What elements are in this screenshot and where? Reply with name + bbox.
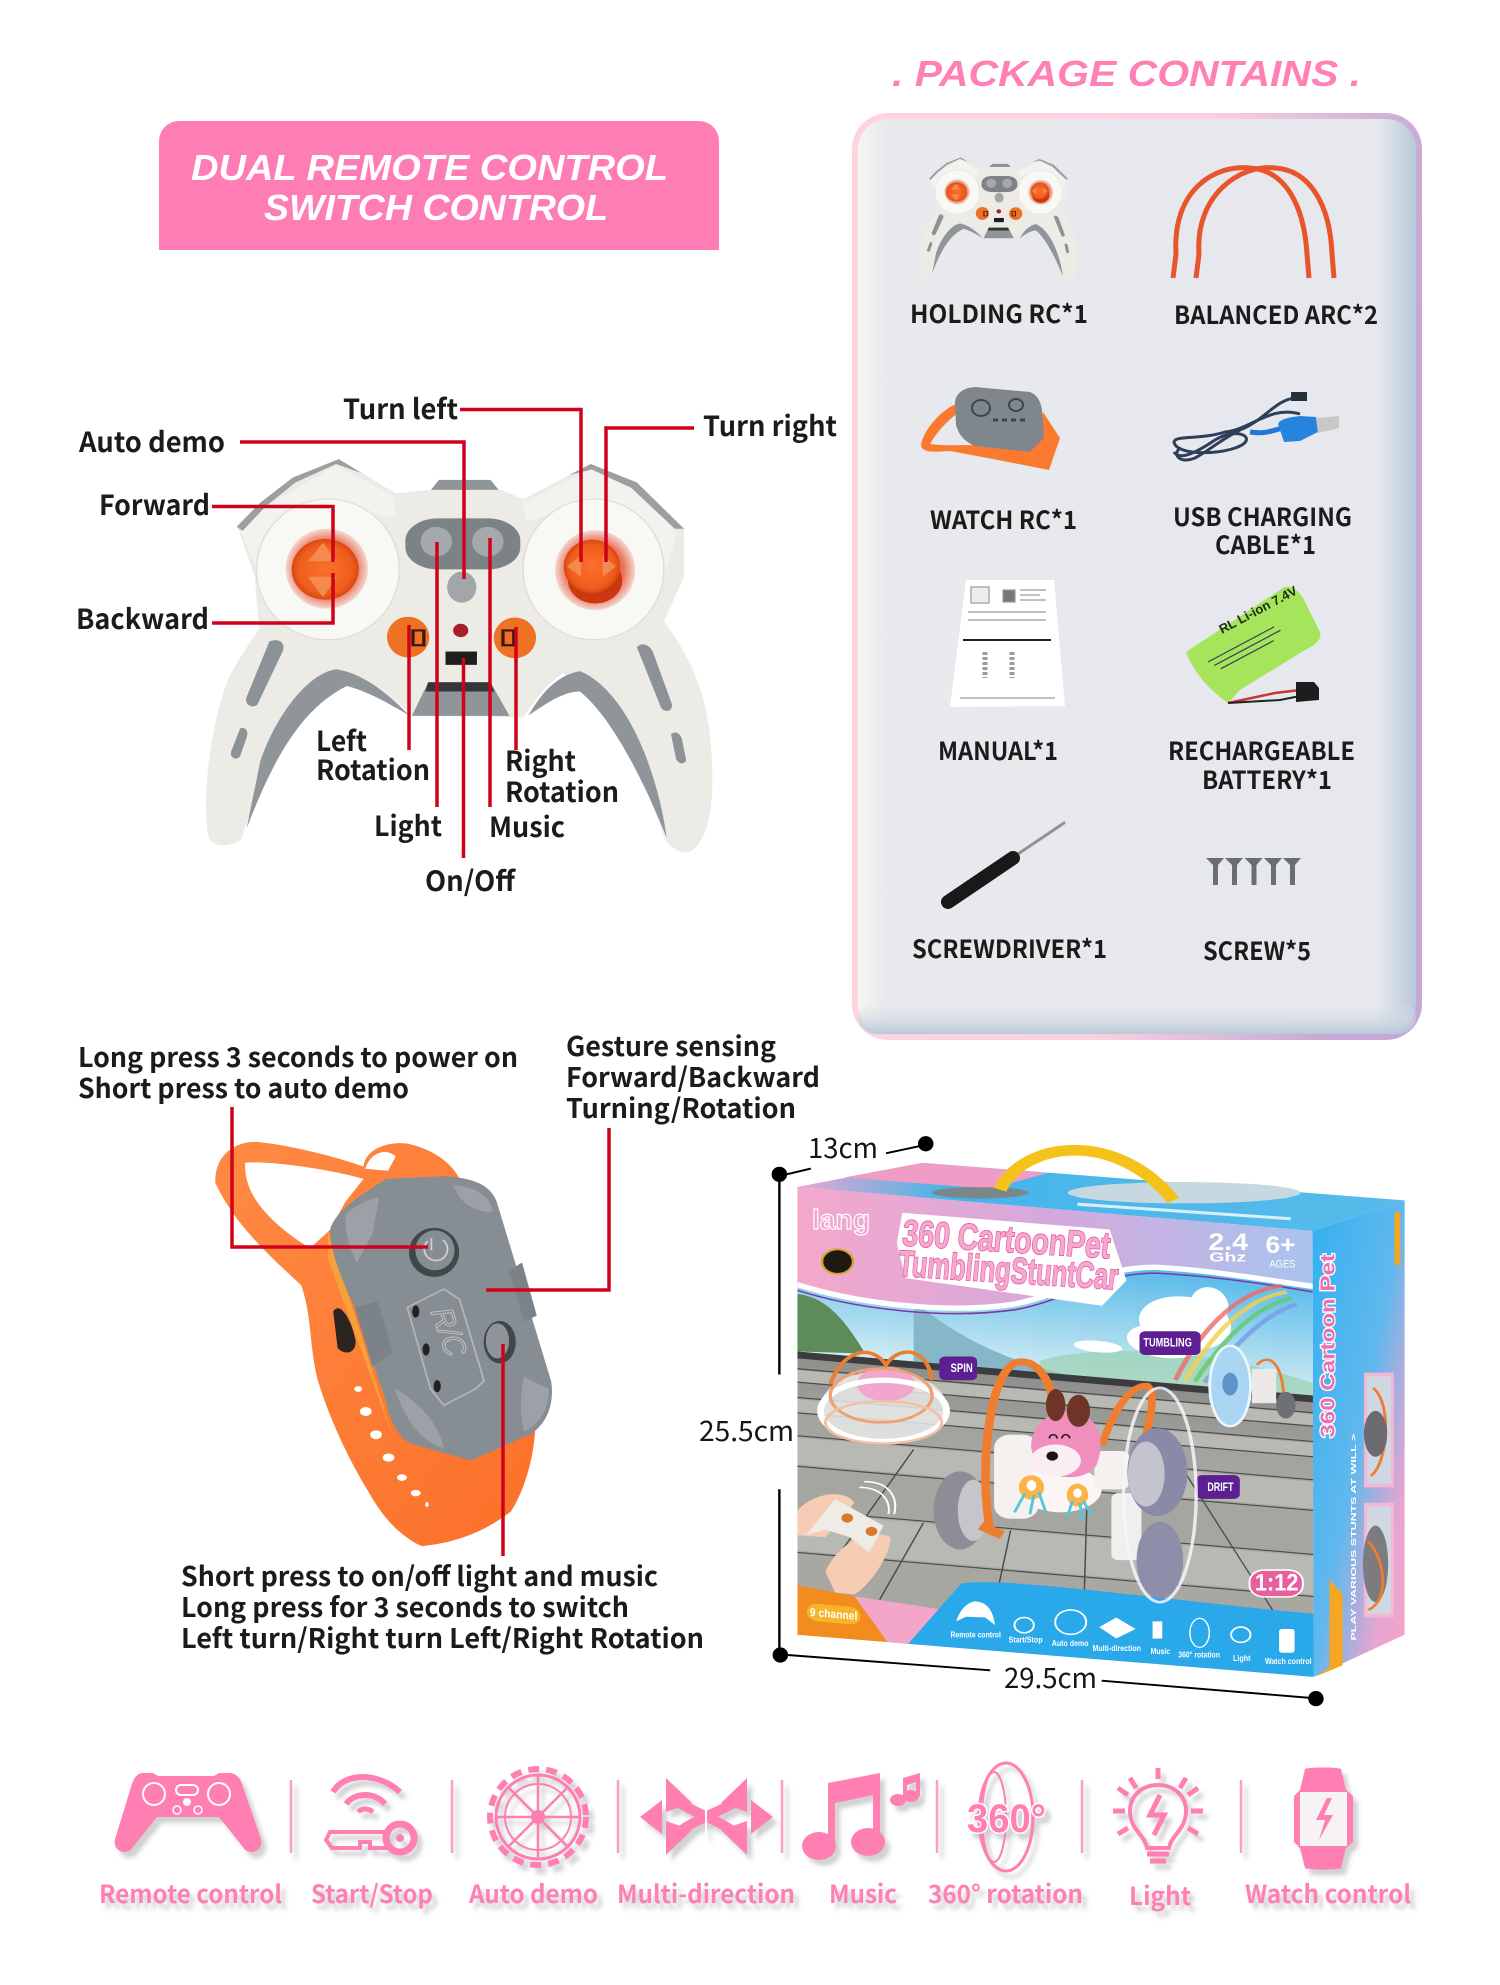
icon: rechargeable battery — [1186, 583, 1320, 703]
box side face: PLAY VARIOUS STUNTS AT WILL > — [1351, 1434, 1358, 1640]
feature strip on box: 360° rotation — [1178, 1651, 1220, 1660]
icon labels: 360° rotation — [928, 1875, 1083, 1911]
icon labels: Start/Stop — [311, 1875, 433, 1911]
labels: controller functions: Forward — [99, 484, 210, 524]
separators — [291, 1780, 1241, 1853]
box side face: 360 Cartoon Pet — [1315, 1254, 1339, 1438]
label: holding rc: HOLDING RC*1 — [910, 295, 1088, 331]
dimension labels: 29.5cm — [1004, 1657, 1097, 1697]
dimension labels: 13cm — [808, 1127, 878, 1167]
brand and age marks: lang — [812, 1205, 870, 1235]
brand and age marks: 2.4 — [1208, 1228, 1248, 1255]
feature tags: DRIFT — [1207, 1480, 1234, 1494]
box front face — [797, 1187, 1316, 1683]
labels: controller functions: Auto demo — [78, 421, 225, 461]
text: light and music note: Short press to on/off light and music — [181, 1555, 658, 1594]
photo: watch remote control: R/C — [424, 1304, 473, 1361]
title logo on box: 360 CartoonPet — [901, 1212, 1113, 1266]
icon labels: Light — [1129, 1877, 1191, 1913]
text: power button note — [78, 1036, 518, 1106]
panel: package contents — [852, 113, 1422, 1040]
dimension lines — [772, 1136, 1324, 1706]
stunt car — [933, 1362, 1196, 1602]
heading: package contains: . PACKAGE CONTAINS . — [892, 53, 1361, 94]
feature tags: 1:12 — [1255, 1569, 1298, 1596]
label: screwdriver: SCREWDRIVER*1 — [912, 930, 1107, 966]
labels: controller functions: Backward — [76, 598, 209, 638]
text: gesture sensing note: Forward/Backward — [566, 1056, 820, 1095]
box top face — [797, 1163, 1405, 1231]
feature strip on box: Light — [1233, 1654, 1251, 1664]
icon: rechargeable battery: RL Li-ion 7.4V — [1216, 583, 1300, 637]
label: rechargeable battery — [1168, 732, 1355, 797]
icon: holding remote control — [919, 157, 1077, 281]
feature tags: TUMBLING — [1143, 1335, 1192, 1349]
icon labels: Watch control — [1245, 1875, 1411, 1911]
icon: five screws — [1206, 858, 1301, 885]
feature strip on box: Music — [1151, 1647, 1170, 1656]
callout lines: controller — [212, 410, 694, 858]
text: light and music note: Left turn/Right turn Left/Right Rotation — [181, 1617, 704, 1656]
icon labels — [99, 1875, 1411, 1913]
photo: dual remote controller — [206, 459, 712, 852]
icon labels: Music — [829, 1875, 897, 1911]
icon: screwdriver — [948, 823, 1064, 902]
label: rechargeable battery: RECHARGEABLE — [1168, 732, 1355, 768]
feature strip on box: Remote control — [950, 1630, 1001, 1640]
dual remote control banner: DUAL REMOTE CONTROL — [191, 147, 668, 188]
icon: manual sheet — [950, 580, 1065, 707]
title logo on box: TumblingStuntCar — [896, 1243, 1120, 1297]
icon: watch control — [1294, 1768, 1353, 1870]
icon: light bulb — [1113, 1768, 1203, 1861]
photo: watch remote control — [215, 1142, 552, 1546]
spin effect — [821, 1352, 947, 1443]
text: light and music note — [181, 1555, 704, 1656]
feature strip on box: Auto demo — [1052, 1639, 1089, 1649]
labels: controller functions: On/Off — [425, 860, 517, 900]
icon: 360 rotation — [967, 1763, 1046, 1871]
dimension labels — [699, 1127, 1097, 1697]
icon: watch remote control — [921, 387, 1060, 470]
text: gesture sensing note: Gesture sensing — [566, 1025, 776, 1064]
icon: auto demo gear — [490, 1769, 586, 1865]
label: balanced arc: BALANCED ARC*2 — [1174, 296, 1378, 332]
text: gesture sensing note — [566, 1025, 820, 1126]
photo: product box — [772, 1136, 1405, 1706]
text: power button note: Short press to auto demo — [78, 1067, 409, 1106]
dual remote control banner: SWITCH CONTROL — [264, 187, 608, 228]
feature strip on box: Watch control — [1265, 1657, 1312, 1667]
labels: controller functions: Left — [316, 720, 367, 760]
title logo on box — [892, 1212, 1132, 1307]
icon: start stop key — [326, 1777, 414, 1852]
label: usb charging cable: USB CHARGING — [1173, 498, 1352, 534]
text: light and music note: Long press for 3 seconds to switch — [181, 1586, 629, 1625]
second car in background — [1210, 1346, 1296, 1426]
icon: remote control — [115, 1773, 261, 1852]
label: usb charging cable — [1173, 498, 1352, 562]
icon: balanced arcs — [1173, 168, 1334, 278]
labels: controller functions: Rotation — [505, 771, 619, 811]
icon labels: Multi-direction — [617, 1875, 795, 1911]
feature strip on box — [950, 1601, 1312, 1667]
text: gesture sensing note: Turning/Rotation — [566, 1087, 796, 1126]
feature strip on box: Start/Stop — [1009, 1635, 1043, 1645]
9 channel badge: 9 channel — [810, 1605, 857, 1623]
label: rechargeable battery: BATTERY*1 — [1202, 761, 1332, 797]
box handle — [1000, 1150, 1173, 1200]
brand and age marks: Ghz — [1209, 1251, 1246, 1265]
labels: controller functions: Turn left — [343, 388, 458, 428]
icon labels: Remote control — [99, 1875, 282, 1911]
labels: controller functions — [76, 388, 837, 900]
label: usb charging cable: CABLE*1 — [1215, 526, 1316, 562]
label: manual: MANUAL*1 — [938, 732, 1058, 768]
feature tags: SPIN — [950, 1360, 973, 1374]
label: screw: SCREW*5 — [1203, 932, 1311, 968]
hand with mini controller — [797, 1482, 895, 1595]
icon: usb charging cable — [1174, 392, 1339, 460]
labels: controller functions: Right — [505, 740, 576, 780]
icon: 360 rotation: 360° — [967, 1797, 1046, 1841]
box side face — [1313, 1200, 1405, 1677]
labels: controller functions: Light — [374, 805, 442, 845]
labels: controller functions: Music — [489, 806, 565, 846]
brand and age marks — [812, 1205, 1296, 1274]
brand and age marks: 6+ — [1266, 1231, 1296, 1258]
dual remote control banner — [159, 121, 719, 250]
feature strip on box: Multi-direction — [1092, 1644, 1141, 1654]
callout lines: watch — [232, 1107, 609, 1556]
label: watch rc: WATCH RC*1 — [930, 501, 1077, 537]
icon: music notes — [802, 1773, 920, 1860]
9 channel badge — [807, 1603, 860, 1625]
labels: controller functions: Rotation — [316, 749, 430, 789]
text: power button note: Long press 3 seconds to power on — [78, 1036, 518, 1075]
labels: controller functions: Turn right — [703, 405, 837, 445]
icon labels: Auto demo — [468, 1875, 598, 1911]
icon: multi direction arrows — [640, 1778, 773, 1855]
dimension labels: 25.5cm — [699, 1410, 794, 1450]
brand and age marks: AGES — [1269, 1257, 1296, 1270]
feature icon row — [99, 1763, 1411, 1913]
feature tags — [939, 1331, 1303, 1597]
